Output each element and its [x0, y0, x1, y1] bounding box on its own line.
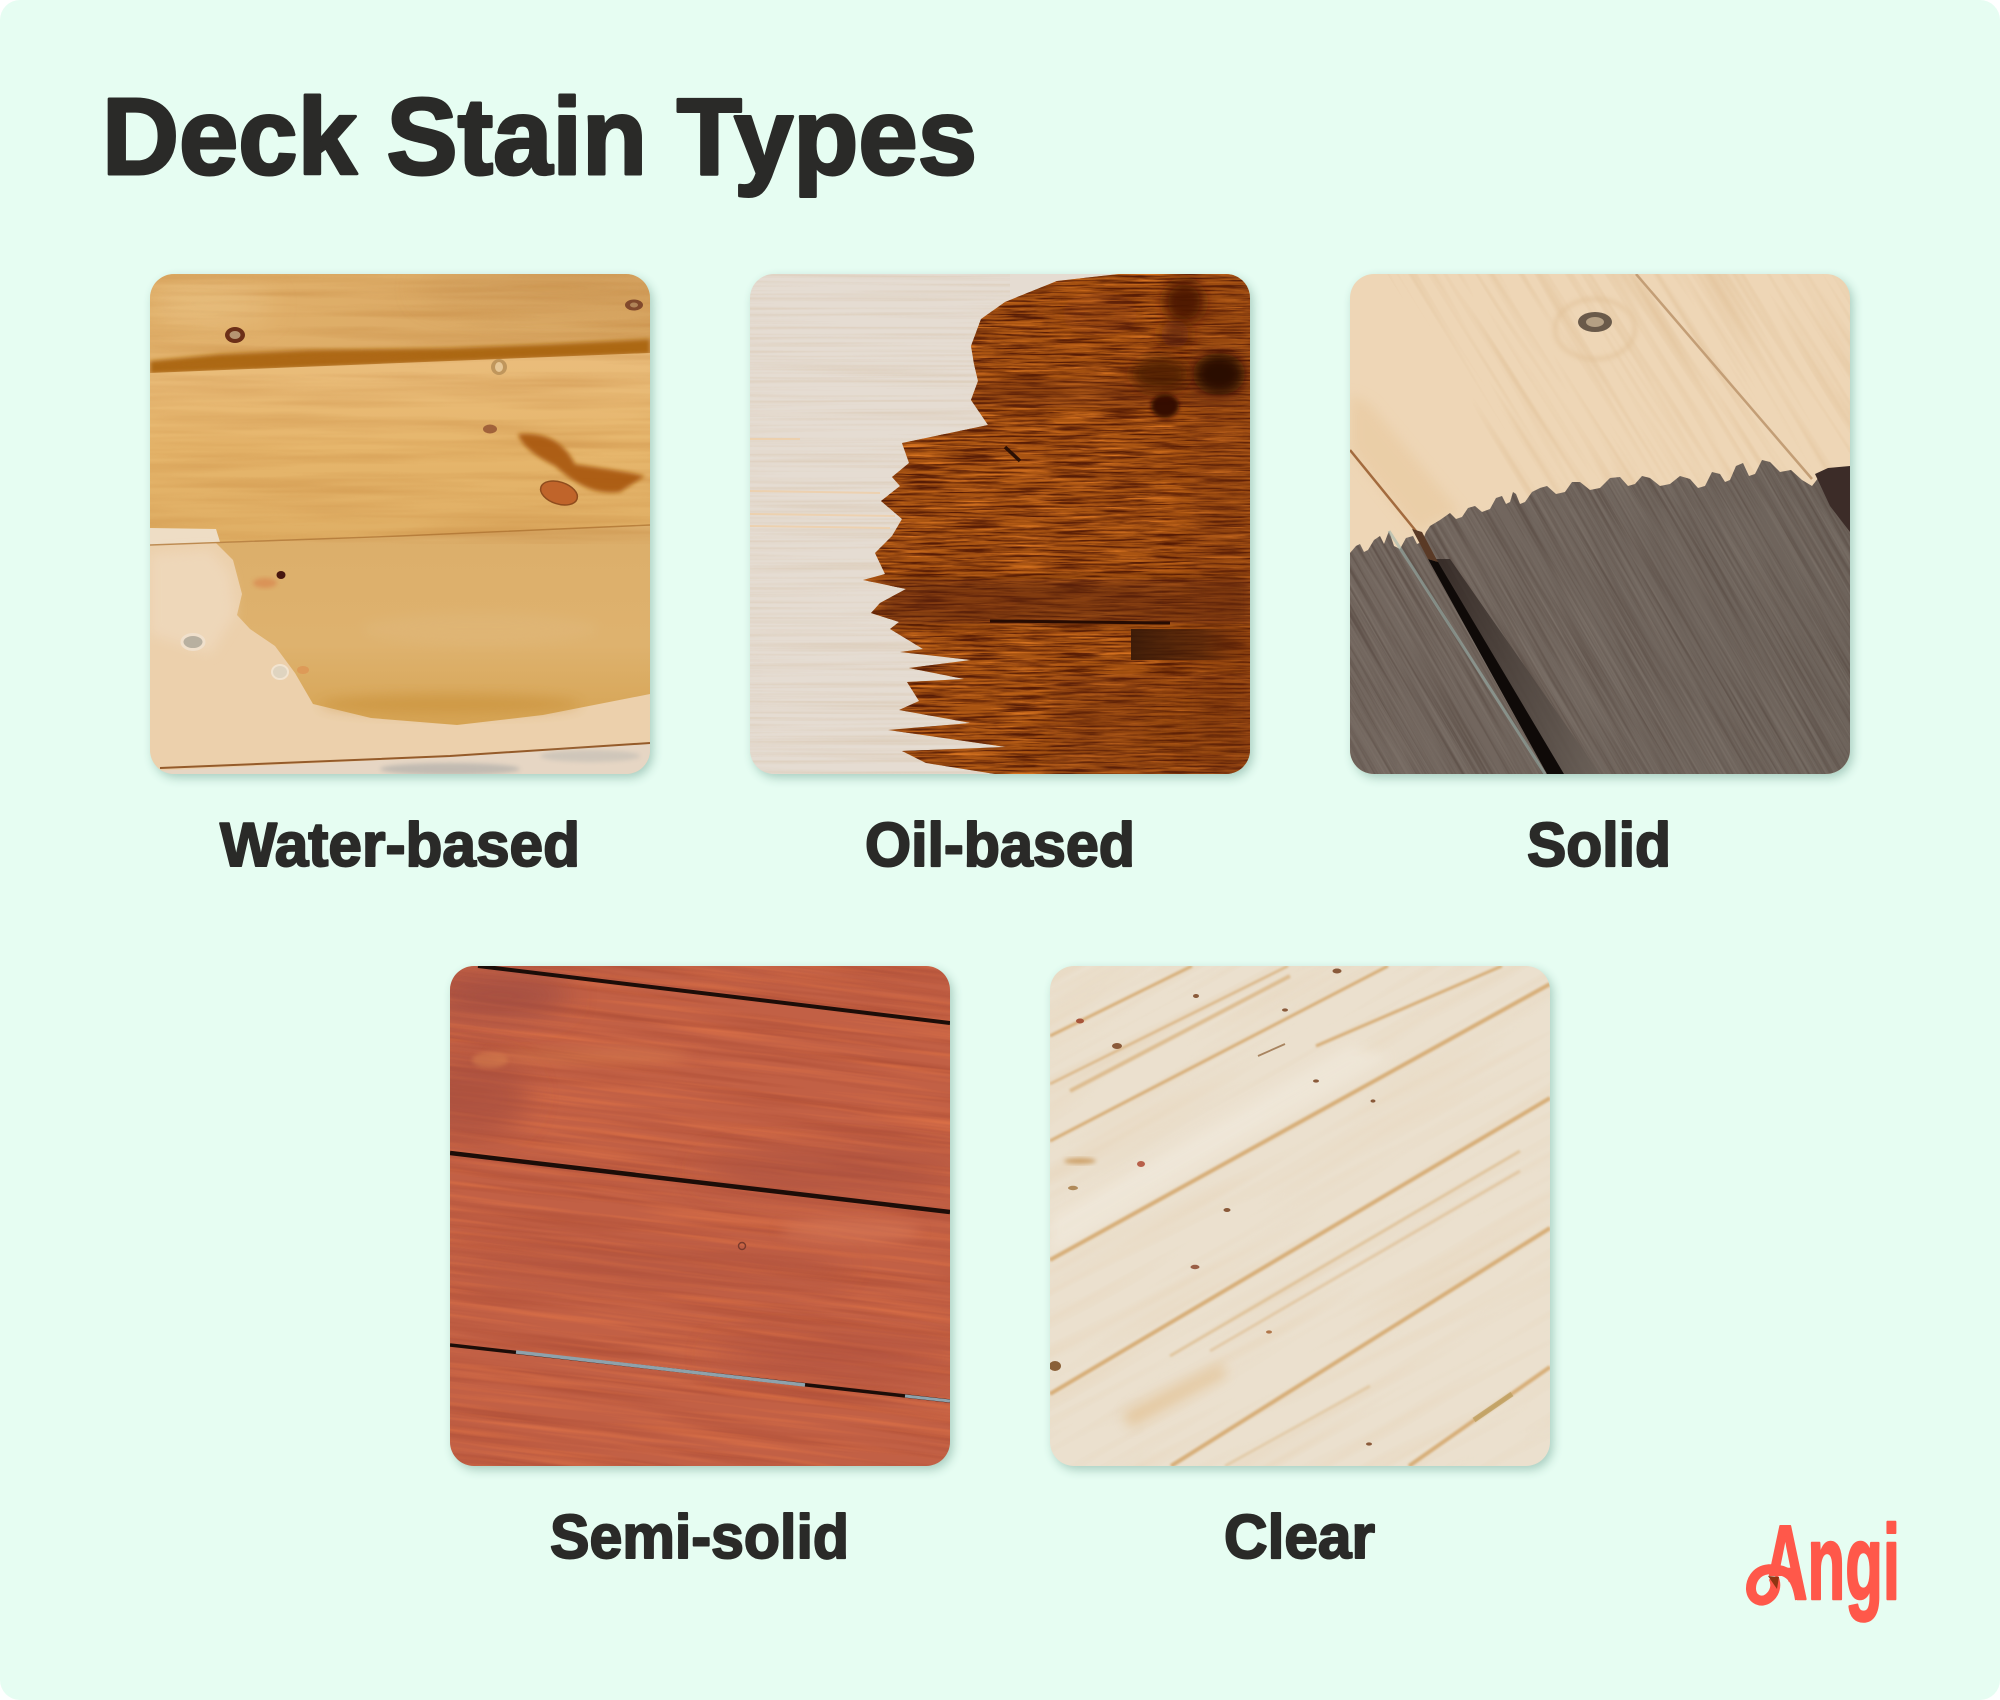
title: Deck Stain Types: [102, 76, 977, 198]
panel: water-based stain: [130, 266, 680, 778]
panel: solid stain: [1348, 273, 1858, 783]
panel: clear stain: [1048, 965, 1558, 1475]
panel: oil-based stain: [750, 274, 1253, 778]
logo: Angi: [1751, 1504, 1900, 1622]
panel: semi-solid stain: [448, 965, 958, 1475]
label: oil-based: Oil-based: [865, 811, 1135, 880]
label: semi-solid: Semi-solid: [550, 1503, 849, 1572]
label: clear: Clear: [1224, 1503, 1375, 1572]
label: solid: Solid: [1527, 811, 1671, 880]
logo: Angi: Angi: [1763, 1504, 1900, 1622]
label: water-based: Water-based: [220, 811, 580, 880]
